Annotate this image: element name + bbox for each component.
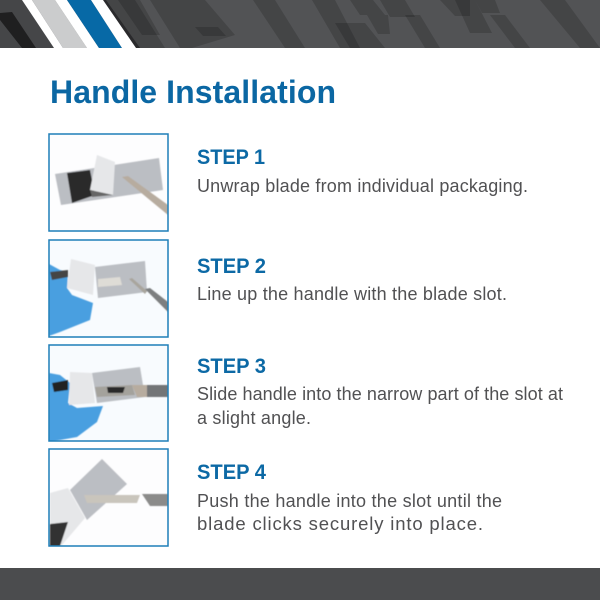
step 3 description — [197, 384, 563, 428]
step 3 description: a slight angle. — [197, 408, 311, 428]
step 4 heading: STEP 4 — [197, 461, 266, 484]
step 3 photo — [49, 345, 168, 442]
title: Handle Installation — [50, 74, 336, 110]
step 2 description: Line up the handle with the blade slot. — [197, 284, 507, 304]
step 1 heading: STEP 1 — [197, 146, 265, 169]
step 1 description: Unwrap blade from individual packaging. — [197, 176, 528, 196]
step 2 heading: STEP 2 — [197, 255, 266, 278]
step 4 photo — [49, 449, 168, 546]
step 4 description: blade clicks securely into place. — [197, 513, 483, 534]
step 4 description — [197, 491, 502, 534]
step 1 photo — [49, 134, 168, 231]
step 4 description: Push the handle into the slot until the — [197, 491, 502, 511]
footer bar — [0, 568, 600, 600]
step 3 heading: STEP 3 — [197, 355, 266, 378]
header banner — [0, 0, 600, 48]
step 2 photo — [49, 240, 168, 337]
step 3 description: Slide handle into the narrow part of the slot at — [197, 384, 563, 404]
